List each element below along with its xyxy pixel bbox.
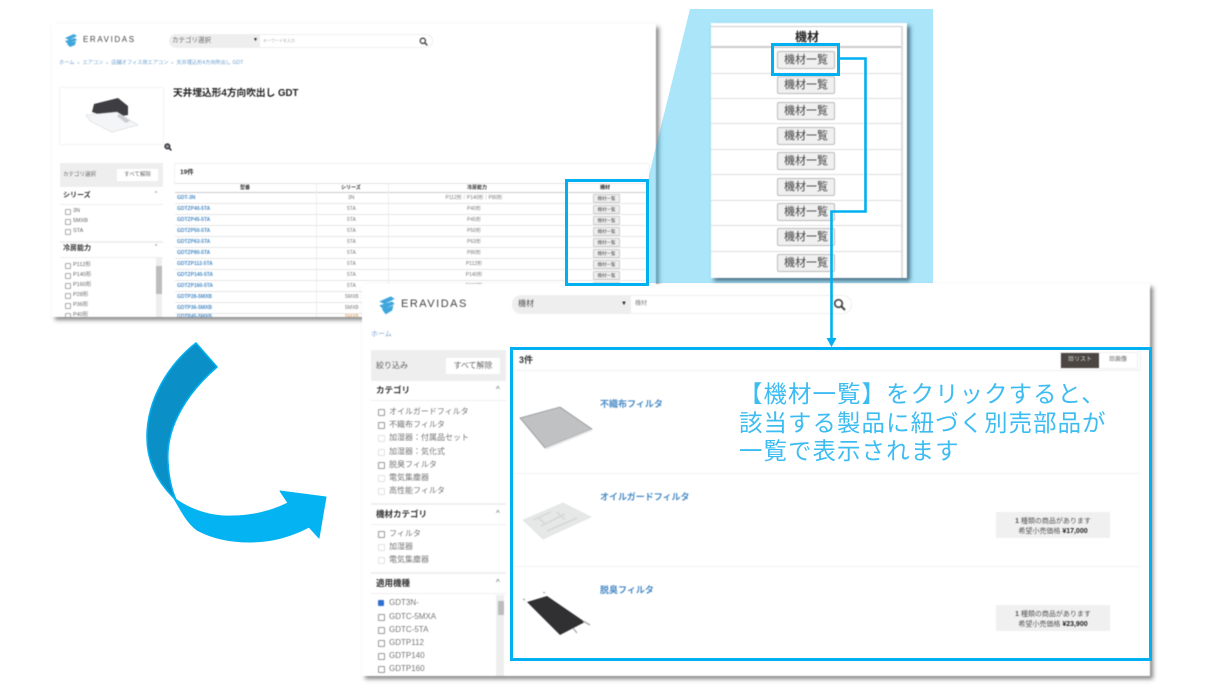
model table: P140形	[466, 272, 482, 278]
section: category	[372, 384, 506, 496]
button: 機材一覧	[784, 231, 828, 243]
model table: GDTP36-5MXB	[177, 304, 212, 310]
logo: ERAVIDAS	[64, 34, 136, 48]
product image	[59, 87, 164, 145]
model table: 5TA	[347, 272, 356, 278]
model table: シリーズ	[341, 184, 361, 190]
callout text: 【機材一覧】をクリックすると、	[739, 381, 1106, 407]
button	[777, 228, 835, 246]
panel: enlarged equipment column	[711, 23, 907, 278]
filter header: すべて解除	[453, 361, 493, 370]
price box: 1 種類の商品があります	[1015, 518, 1091, 525]
model table: GDTZP50-5TA	[177, 228, 210, 234]
view toggle	[1060, 352, 1138, 369]
search bar: 機材	[635, 301, 647, 307]
model table: GDTZP112-5TA	[177, 260, 213, 266]
arrow: connector from button to results	[826, 57, 867, 347]
logo: ERAVIDAS: ERAVIDAS	[401, 298, 468, 310]
filter panel: P36形	[73, 302, 88, 308]
model table: 機材一覧	[598, 284, 616, 288]
callout text: 一覧で表示されます	[739, 438, 960, 464]
model table: 5TA	[347, 206, 356, 212]
model table: 5TA	[347, 216, 356, 222]
model table: 機材一覧	[598, 272, 616, 278]
model table: GDTZP80-5TA	[177, 250, 210, 256]
model table: P80形	[467, 250, 481, 256]
search bar	[169, 34, 433, 48]
model table: 機材一覧	[598, 228, 616, 234]
section: applicable models: GDTC-5MXA	[389, 612, 436, 620]
model table: GDTZP160-5TA	[177, 282, 213, 288]
section: applicable models: GDTC-5TA	[389, 624, 428, 634]
search bar: 機材	[518, 299, 534, 308]
button	[777, 127, 835, 145]
filter header: カテゴリ選択	[63, 172, 96, 178]
model table: 冷房能力	[467, 184, 487, 190]
button	[777, 254, 835, 272]
model table: 5TA	[347, 282, 356, 288]
model table: 機材一覧	[598, 240, 616, 244]
button: 機材一覧	[784, 105, 828, 117]
search bar	[512, 295, 852, 314]
results header: 3件	[519, 354, 533, 364]
view toggle: ▦リスト	[1068, 357, 1092, 363]
section: applicable models: 適用機種	[376, 578, 410, 588]
model table: P40形	[467, 206, 481, 212]
button: 機材一覧	[784, 130, 828, 142]
model table: 5TA	[347, 260, 356, 266]
item: oil guard filter	[515, 474, 1140, 567]
model table: GDTZP140-5TA	[177, 272, 213, 278]
button	[777, 102, 835, 120]
search bar: ▼	[621, 301, 627, 307]
logo: ERAVIDAS	[379, 296, 468, 315]
model table: P112形	[466, 260, 482, 266]
button: 機材一覧	[784, 155, 828, 167]
model table: GDT-3N	[177, 194, 195, 200]
section: category: 高性能フィルタ	[389, 486, 445, 495]
results count	[174, 163, 650, 184]
section: category: カテゴリ	[376, 385, 410, 395]
button: 機材一覧	[784, 181, 828, 193]
filter panel: ^	[155, 244, 157, 250]
filter panel: シリーズ	[63, 192, 91, 199]
section: equipment category: ^	[496, 508, 500, 518]
results count: 19件	[180, 168, 194, 176]
model table: 3N	[348, 194, 354, 200]
section: applicable models: GDTP160	[389, 664, 425, 672]
model table: P112形｜P140形｜P80形	[446, 194, 502, 200]
price box	[996, 512, 1110, 538]
section: category: ^	[496, 385, 500, 394]
icon: zoom magnifier	[164, 142, 172, 152]
highlight: first button	[771, 43, 840, 76]
button: 機材一覧	[784, 54, 828, 66]
filter header	[60, 163, 163, 187]
filter panel: 3N	[73, 208, 80, 214]
model table: 5MXB	[345, 294, 359, 300]
item: non-woven filter	[515, 371, 1140, 474]
model table: 5TA	[347, 238, 356, 244]
highlight: results list	[510, 347, 1152, 661]
filter header: 絞り込み	[376, 360, 408, 370]
column heading: 機材	[795, 30, 819, 44]
filter panel	[371, 350, 506, 676]
search bar: キーワードを入力	[263, 38, 295, 43]
arrow: curved arrow between screenshots	[146, 342, 326, 542]
filter panel: 5MXB	[73, 218, 88, 224]
breadcrumb: ホーム ﹥ エアコン ﹥ 店舗オフィス用エアコン ﹥ 天井埋込形4方向吹出し GDT	[59, 60, 243, 66]
section: applicable models: GDT3N-	[389, 598, 419, 607]
filter panel: P112形	[73, 262, 91, 268]
results header	[515, 350, 1141, 371]
highlight: equipment column	[565, 179, 649, 286]
search bar: カテゴリ選択	[172, 37, 211, 44]
model table: P63形	[467, 238, 481, 244]
model table: 機材一覧	[598, 262, 616, 266]
section: category: 不織布フィルタ	[389, 420, 445, 429]
filter panel: 冷房能力	[63, 245, 91, 252]
model table: GDTZP45-5TA	[177, 216, 210, 222]
model table: 機材	[600, 184, 610, 190]
model table: 機材一覧	[598, 250, 616, 256]
model table: GDTZP63-5TA	[177, 238, 210, 244]
search bar: ▼	[253, 37, 258, 43]
filter panel: STA	[73, 228, 83, 234]
button	[777, 76, 835, 94]
price box	[996, 605, 1110, 631]
filter panel: P140形	[73, 272, 91, 278]
button	[777, 152, 835, 170]
section: category: 電気集塵器	[389, 473, 429, 482]
model table: P160形	[466, 282, 482, 288]
price box: 希望小売価格 ¥23,900	[1018, 621, 1088, 628]
callout text	[739, 381, 1107, 464]
view toggle: ▦画像	[1109, 357, 1127, 363]
section: equipment category: 加湿器	[389, 542, 413, 551]
model table: GDTZP40-5TA	[177, 206, 210, 212]
section: applicable models	[372, 578, 506, 676]
section: equipment category: 機材カテゴリ	[376, 508, 427, 518]
model table: 5MXB	[345, 304, 359, 310]
product title: 天井埋込形4方向吹出し GDT	[173, 88, 298, 99]
section: applicable models: GDTP140	[389, 650, 425, 660]
callout text: 該当する製品に紐づく別売部品が	[739, 410, 1107, 436]
model table: 機材一覧	[598, 218, 616, 222]
button: 機材一覧	[784, 79, 828, 91]
section: category: 加湿器：付属品セット	[389, 433, 469, 442]
section: category: オイルガードフィルタ	[389, 407, 469, 416]
filter panel	[60, 163, 163, 318]
model table: 5TA	[347, 250, 356, 256]
logo: ERAVIDAS: ERAVIDAS	[83, 35, 136, 44]
filter panel: P160形	[73, 282, 91, 288]
model table: 機材一覧	[598, 206, 616, 212]
price box: 1 種類の商品があります	[1015, 611, 1091, 618]
model table	[174, 183, 646, 318]
model table: 5TA	[347, 228, 356, 234]
price box: 希望小売価格 ¥17,000	[1018, 528, 1088, 535]
model table: P50形	[467, 228, 481, 234]
button	[777, 203, 835, 221]
button	[777, 51, 835, 69]
screenshot: product list page	[52, 24, 656, 317]
item: non-woven filter: 不織布フィルタ	[600, 399, 663, 409]
model table: P45形	[467, 216, 481, 222]
filter panel: P28形	[73, 292, 88, 298]
filter header	[371, 350, 506, 381]
filter panel: ^	[155, 191, 157, 197]
item: oil guard filter: オイルガードフィルタ	[600, 492, 690, 502]
section: category: 加湿器：気化式	[389, 447, 445, 456]
button: 機材一覧	[784, 206, 828, 218]
item: deodorizing filter: 脱臭フィルタ	[600, 585, 654, 595]
section: category: 脱臭フィルタ	[389, 460, 437, 469]
breadcrumb: ホーム	[371, 331, 392, 338]
section: applicable models: ^	[496, 578, 500, 586]
zoom wedge: light blue background	[649, 9, 933, 283]
section: equipment category: 電気集塵器	[389, 555, 429, 564]
section: applicable models: GDTP112	[389, 638, 424, 646]
item: deodorizing filter	[522, 584, 1110, 636]
screenshot: equipment list page	[362, 284, 1150, 676]
model table: 型番	[240, 184, 250, 190]
filter header: すべて解除	[124, 172, 151, 178]
section: equipment category	[372, 508, 506, 564]
model table: 機材一覧	[598, 196, 616, 200]
model table: GDTP28-5MXB	[177, 294, 212, 300]
section: equipment category: フィルタ	[389, 529, 421, 538]
button	[777, 178, 835, 196]
button: 機材一覧	[784, 257, 828, 269]
